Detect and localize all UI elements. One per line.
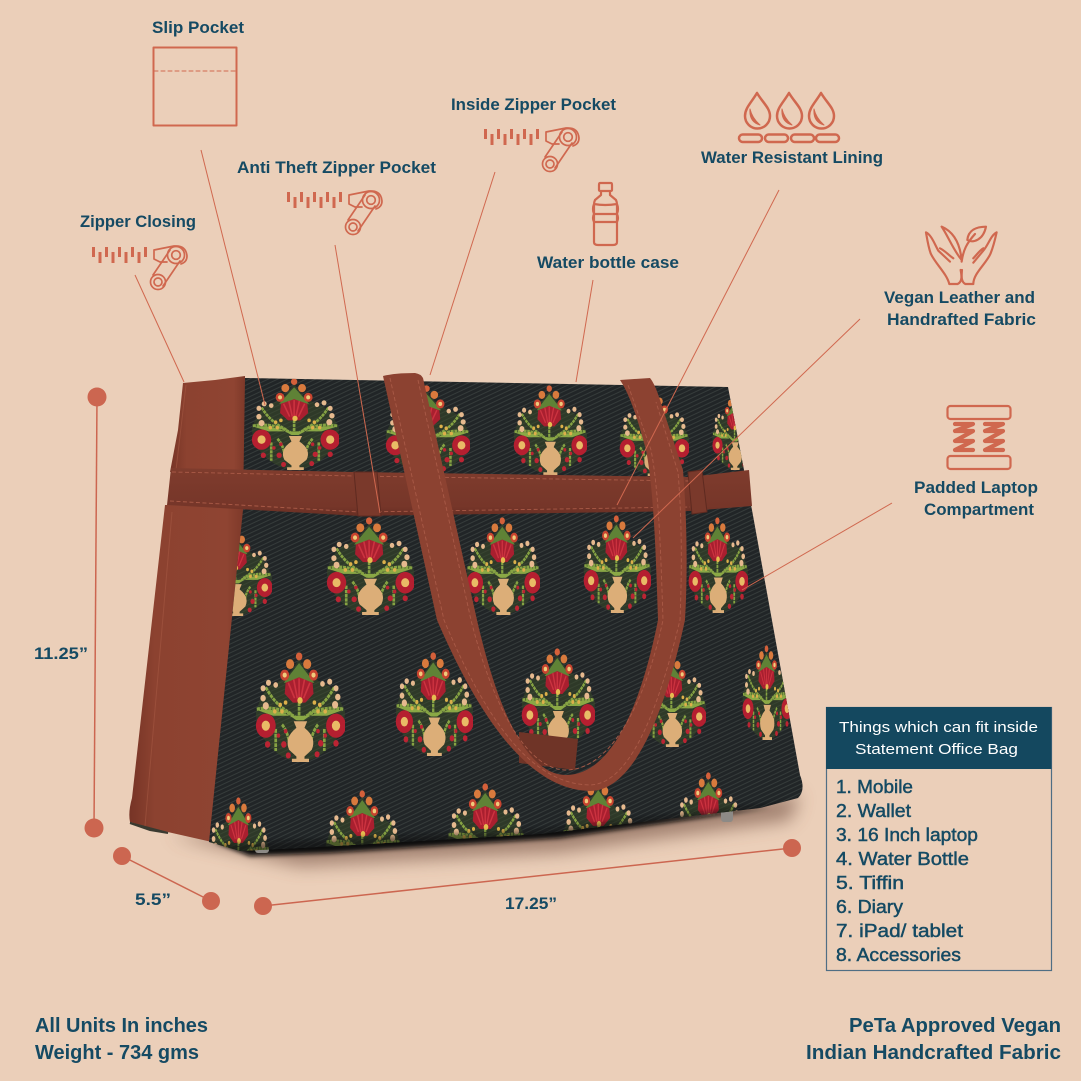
callout: vegan leather: Vegan Leather and — [884, 288, 1035, 307]
bag feet — [255, 808, 733, 853]
icon: zipper — [94, 246, 187, 290]
bag photo — [129, 370, 820, 897]
icon: padding spring — [948, 406, 1010, 469]
callout: zipper closing — [80, 212, 196, 290]
shoulder strap — [383, 373, 687, 791]
footer right: certification: PeTa Approved Vegan — [849, 1015, 1061, 1037]
item list: 3. 16 Inch laptop — [836, 825, 978, 845]
panel header — [826, 707, 1052, 769]
dimension: width — [254, 839, 801, 915]
strap stitching — [390, 378, 681, 785]
panel: things which can fit inside — [826, 707, 1052, 970]
item list: 2. Wallet — [836, 801, 911, 821]
callout: padded laptop compartment: Compartment — [924, 500, 1034, 519]
footer left: units and weight: All Units In inches — [35, 1015, 208, 1037]
dimension: height: 11.25” — [34, 644, 88, 663]
item list — [836, 777, 978, 965]
band loop left — [354, 472, 381, 516]
callout: anti theft zipper pocket — [237, 158, 436, 234]
dimension: depth — [113, 847, 220, 910]
footer left: units and weight — [35, 1015, 208, 1064]
item list: 4. Water Bottle — [836, 849, 969, 869]
callout: zipper closing: Zipper Closing — [80, 212, 196, 231]
bottom fabric sliver — [130, 823, 168, 833]
callout: water resistant lining: Water Resistant Lining — [701, 148, 883, 167]
footer left: units and weight: Weight - 734 gms — [35, 1042, 199, 1064]
callout: vegan leather: Handrafted Fabric — [887, 310, 1036, 329]
leather tag — [519, 732, 578, 770]
side gusset lower — [129, 505, 244, 842]
footer right: certification: Indian Handcrafted Fabric — [806, 1042, 1061, 1064]
icon: slip pocket — [154, 48, 236, 126]
callout: vegan leather — [884, 227, 1036, 329]
gusset seam — [145, 385, 186, 826]
black patterned fabric — [209, 378, 803, 851]
callout: water resistant lining — [701, 93, 883, 167]
icon: water bottle — [593, 183, 618, 245]
callout: water bottle case: Water bottle case — [537, 253, 679, 272]
callout: slip pocket — [152, 18, 244, 126]
floral motifs row 4 — [211, 772, 738, 851]
dimension: width: 17.25” — [505, 894, 557, 913]
floral motifs row 2 — [201, 515, 749, 616]
callout: slip pocket: Slip Pocket — [152, 18, 244, 37]
footer right: certification — [806, 1015, 1061, 1064]
item list: 8. Accessories — [836, 945, 961, 965]
callout: padded laptop compartment — [914, 406, 1038, 519]
side gusset upper — [170, 376, 245, 472]
callout: anti theft zipper pocket: Anti Theft Zipper Pocket — [237, 158, 436, 177]
dimension: depth: 5.5” — [135, 890, 171, 909]
icon: zipper — [288, 191, 382, 234]
contact shadow — [214, 808, 770, 856]
item list: 5. Tiffin — [836, 873, 904, 893]
floral motifs row 1 — [252, 378, 758, 476]
dimension: height — [34, 388, 106, 838]
icon: hands and leaves — [926, 227, 997, 284]
band loop right — [688, 470, 707, 514]
icon: zipper — [486, 128, 579, 172]
callout lines — [135, 150, 892, 590]
waist band — [167, 468, 752, 516]
callout: inside zipper pocket — [451, 95, 616, 172]
callout: padded laptop compartment: Padded Laptop — [914, 478, 1038, 497]
panel header: Things which can fit inside — [839, 719, 1038, 736]
callout: inside zipper pocket: Inside Zipper Pocket — [451, 95, 616, 114]
ground shadow — [170, 795, 800, 866]
icon: water drops — [739, 93, 839, 142]
item list: 1. Mobile — [836, 777, 913, 797]
item list: 6. Diary — [836, 897, 903, 917]
item list: 7. iPad/ tablet — [836, 921, 963, 941]
floral motifs row 3 — [256, 645, 792, 762]
callout: water bottle case — [537, 183, 679, 272]
waist band stitching — [170, 472, 690, 512]
panel header: Statement Office Bag — [855, 741, 1018, 758]
